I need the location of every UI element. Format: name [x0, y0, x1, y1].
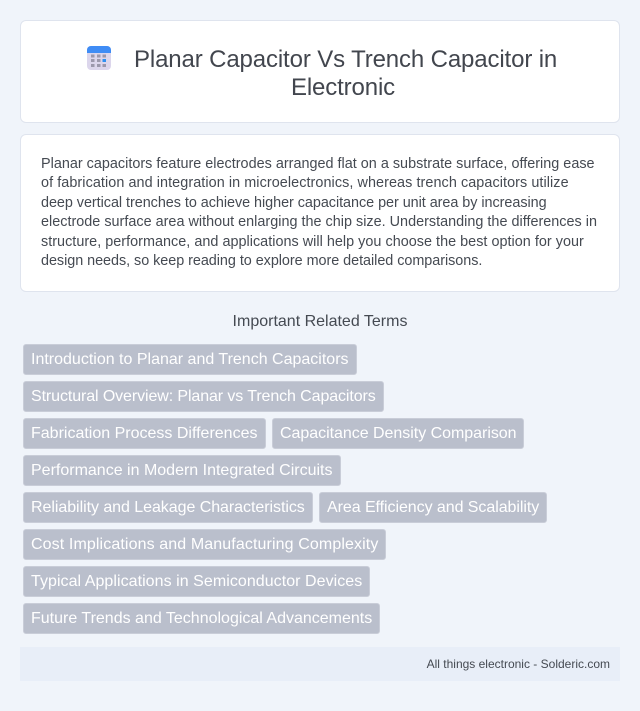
tag: Reliability and Leakage Characteristics	[31, 499, 305, 516]
heading: important related terms: Important Related Terms	[233, 313, 407, 330]
panel: introduction text: Planar capacitors feature electrodes arranged flat on a substrate surface, offering ease	[41, 156, 595, 172]
tag	[23, 529, 386, 560]
footer	[20, 647, 620, 681]
tag	[23, 566, 370, 597]
tag	[23, 381, 384, 412]
icon: calendar	[87, 46, 111, 70]
tag: Structural Overview: Planar vs Trench Capacitors	[31, 388, 376, 405]
tag: Capacitance Density Comparison	[280, 425, 517, 442]
title: Planar Capacitor Vs Trench Capacitor in	[134, 46, 557, 73]
tag: Area Efficiency and Scalability	[327, 499, 539, 516]
panel: introduction text	[20, 134, 620, 292]
tag	[319, 492, 547, 523]
tag: Introduction to Planar and Trench Capacitors	[31, 351, 349, 368]
tag	[272, 418, 524, 449]
footer: All things electronic - Solderic.com	[427, 657, 610, 671]
panel: introduction text: deep vertical trenches to achieve higher capacitance per unit area by increasing	[41, 195, 547, 211]
panel: introduction text: of fabrication and integration in microelectronics, whereas trench capacitors utilize	[41, 175, 569, 191]
tag	[23, 603, 380, 634]
title: Electronic	[291, 74, 395, 101]
tag: Fabrication Process Differences	[31, 425, 257, 442]
tag list	[23, 344, 547, 634]
panel: introduction text: structure, performance, and applications will help you choose the best option for your	[41, 234, 584, 250]
title	[134, 46, 557, 101]
tag: Performance in Modern Integrated Circuits	[31, 462, 332, 479]
tag: Typical Applications in Semiconductor Devices	[31, 573, 362, 590]
panel: header	[20, 20, 620, 123]
tag	[23, 344, 357, 375]
tag	[23, 418, 266, 449]
tag	[23, 492, 313, 523]
tag: Future Trends and Technological Advancements	[31, 610, 372, 627]
panel: introduction text: electrode surface area without enlarging the chip size. Understanding the differences in	[41, 214, 597, 230]
tag	[23, 455, 341, 486]
panel: introduction text: design needs, so keep reading to explore more detailed comparisons.	[41, 253, 482, 269]
tag: Cost Implications and Manufacturing Complexity	[31, 536, 378, 553]
